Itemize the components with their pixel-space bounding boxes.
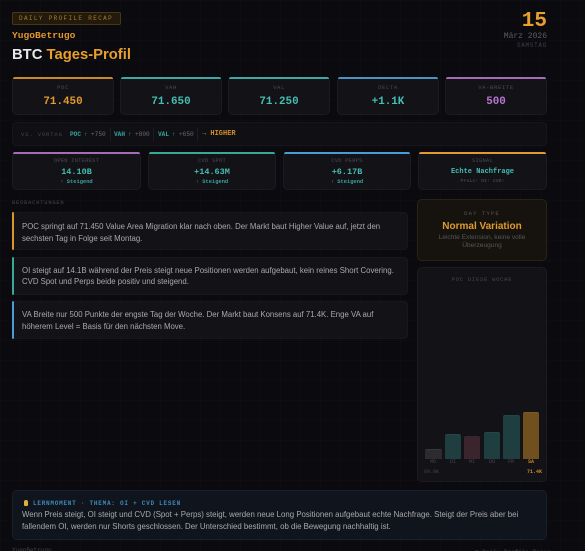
card: Open Interest [12,152,141,190]
metric card: VA-Breite [445,77,547,115]
card: CVD Spot [148,152,276,190]
panel: learning moment [12,490,547,540]
label: MO: MO [430,459,436,465]
label: MI: MI [469,459,475,465]
CVD Perps value: +6.17B [332,167,362,177]
day type note: Überzeugung [462,242,502,249]
VAL change: +650 [179,131,194,138]
badge: daily profile recap [12,12,121,25]
bar: Montag [425,449,442,459]
label: DI: DI [450,459,456,465]
observation 3 text: höherem Level = Basis für den nächsten Move. [22,322,185,330]
observation 1 text [22,222,380,242]
signal value: Echte Nachfrage [451,168,514,176]
observation 2 text: OI steigt auf 14.1B während der Preis steigt neue Positionen werden aufgebaut, kein reines Short Covering. [22,266,394,275]
observation 2 text: CVD Spot und Perps beide positiv und steigend. [22,276,189,286]
metric card: VAH: VAH [165,84,177,91]
CVD Spot trend: ↑ Steigend [196,179,228,185]
observations heading: BEOBACHTUNGEN [12,200,64,206]
CVD Perps trend: ↑ Steigend [331,179,363,185]
POC change [70,131,106,138]
learning text: Wenn Preis steigt, OI steigt und CVD (Spot + Perps) steigt, werden neue Long Positionen aufgebaut echte Nachfrage. Steigt der Preis aber bei [22,510,518,519]
OI value: 14.10B [61,167,92,177]
day type note: Leichte Extension, keine volle [439,234,525,241]
VAH change: +800 [135,131,150,138]
signal note: Preis↑ OI↑ CVD↑ [460,179,505,184]
icon: light bulb [24,500,28,506]
observation 3 text [22,310,374,330]
date block [504,10,547,49]
VAH change: VAH [114,131,125,138]
metric card: POC: POC [57,84,69,91]
card: CVD Perps [283,152,411,190]
Delta value: +1.1K [372,96,404,108]
comparison strip [12,122,547,146]
card: CVD Spot: CVD SPOT [198,158,226,164]
POC change: +750 [91,131,106,138]
metric card: VAL [228,77,330,115]
metric card: Delta: DELTA [378,84,398,91]
learning text [22,510,518,530]
VAH change [114,131,150,138]
VAL change [158,131,194,138]
observation 2 [12,257,408,295]
observation 2 text [22,266,394,286]
learning heading: LERNMOMENT · THEMA: OI + CVD LESEN [33,500,181,507]
metric card: POC [12,77,114,115]
metric card: Delta [337,77,439,115]
bar: Donnerstag [484,432,500,459]
CVD Spot value: +14.63M [194,167,230,177]
badge: daily profile recap: DAILY PROFILE RECAP [19,15,113,22]
VAH value: 71.650 [151,96,191,108]
observation 1 text: sechsten Tag in Folge seit Montag. [22,234,142,242]
label: DO: DO [489,459,495,465]
label: FR: FR [508,459,514,465]
chart heading: POC DIESE WOCHE [452,277,512,283]
author name: YugoBetrugo [12,30,75,41]
VA-Breite value: 500 [486,96,506,108]
title: BTC Tages-Profil [12,47,131,63]
metric card: VA-Breite: VA-BREITE [478,84,514,91]
date day: 15 [522,10,547,33]
observation 1 [12,212,408,250]
VAL value: 71.250 [259,96,299,108]
VAL change: ↑ [172,131,176,138]
day type note [439,234,526,249]
OI trend: ↑ Steigend [60,179,93,185]
card: Signal [418,152,547,190]
POC change: ↑ [84,131,88,138]
panel: day type [417,199,547,261]
day type label: DAY TYPE [464,210,500,217]
chart end value: 71.4K [527,469,542,475]
bar: Mittwoch [464,436,480,459]
bar: Samstag [523,412,539,459]
card: CVD Perps: CVD PERPS [331,158,363,164]
metric card: VAH [120,77,222,115]
observation 1 text: POC springt auf 71.450 Value Area Migration klar nach oben. Der Markt baut Higher Value auf, jetzt den [22,222,380,231]
bar: Freitag [503,415,520,459]
higher verdict: → HIGHER [202,130,236,138]
VAH change: ↑ [128,131,132,138]
chart start value: 69.8K [424,469,439,475]
observation 3 [12,301,408,339]
metric card: VAL: VAL [273,84,285,91]
learning text: fallendem OI, werden nur Shorts geschlossen. Der Unterschied bestimmt, ob die Bewegung nachhaltig ist. [22,522,391,530]
card: Open Interest: OPEN INTEREST [54,158,99,164]
date month: März 2026 [504,32,547,41]
label: SA: SA [528,459,534,465]
POC value: 71.450 [43,96,83,108]
comparison label: VS. VORTAG [21,131,63,138]
bar: Dienstag [445,434,461,459]
VAL change: VAL [158,131,169,138]
observation 3 text: VA Breite nur 500 Punkte der engste Tag der Woche. Der Markt baut Konsens auf 71.4K. Enge VA auf [22,310,373,318]
day type value: Normal Variation [442,221,522,232]
panel: POC week chart [417,267,547,482]
card: Signal: SIGNAL [472,158,493,164]
POC change: POC [70,131,81,138]
date weekday: SAMSTAG [517,42,547,49]
